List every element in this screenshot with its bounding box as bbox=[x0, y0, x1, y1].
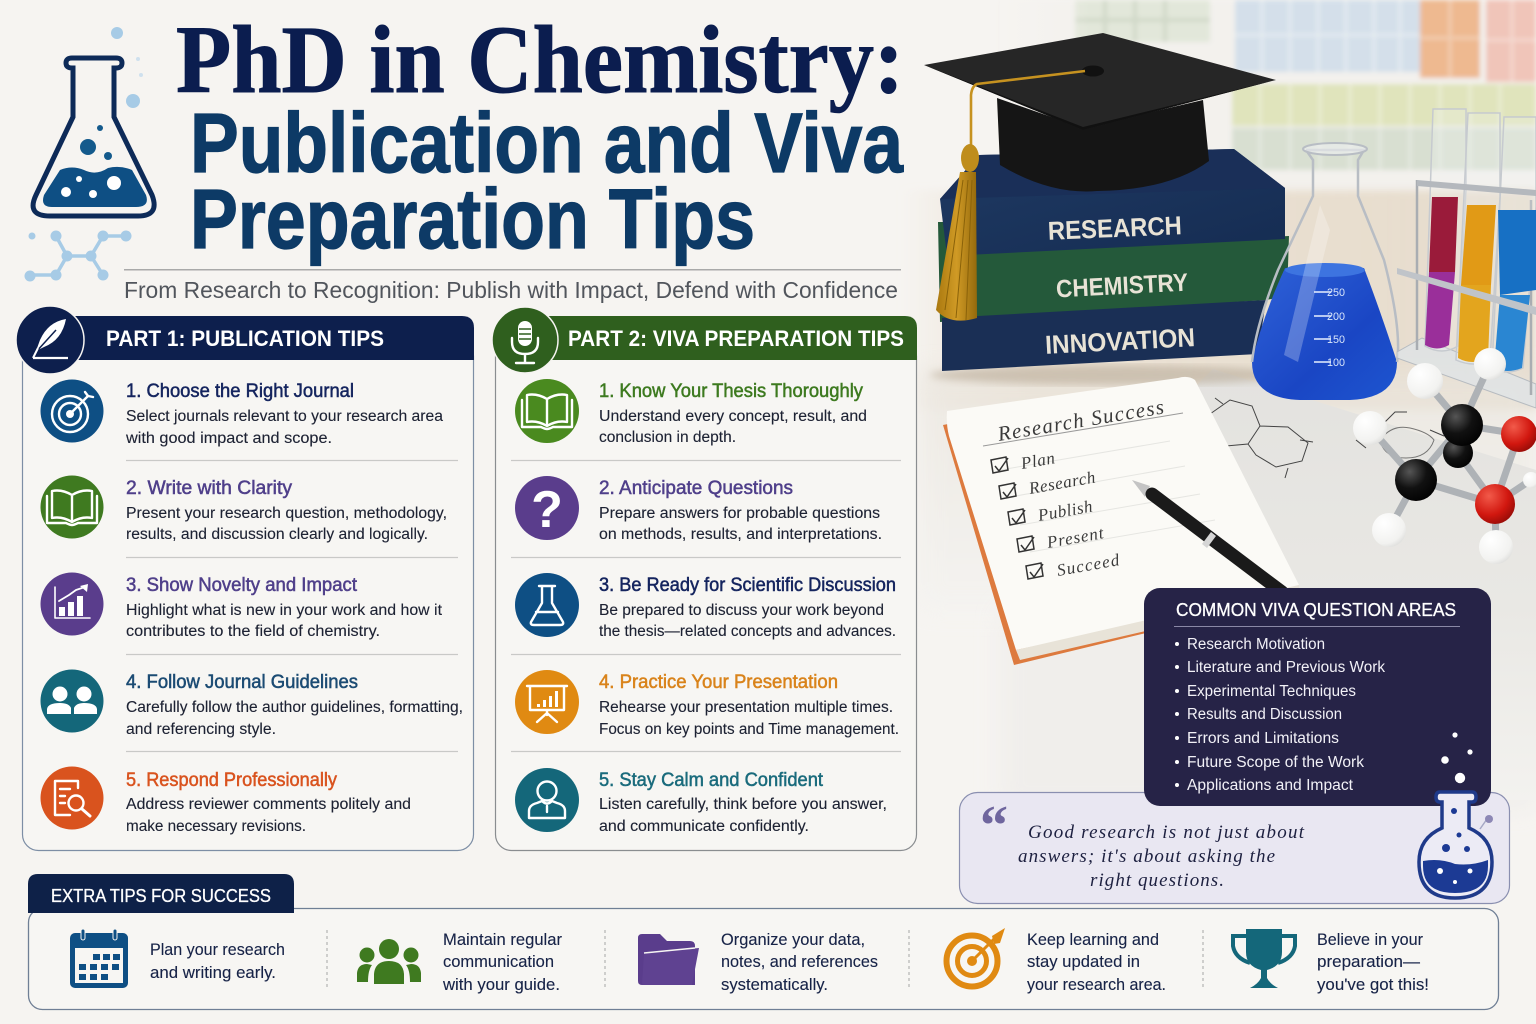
blue tube bbox=[1492, 117, 1536, 372]
icon: document search bbox=[40, 766, 104, 830]
extra tip: keep learning bbox=[946, 928, 1166, 994]
extra tip: plan early bbox=[70, 929, 285, 988]
tip 2: anticipate questions bbox=[515, 476, 882, 543]
tip 1: choose the right journal: Select journals relevant to your research area bbox=[126, 408, 443, 425]
extra tip: keep learning: stay updated in bbox=[1027, 953, 1140, 971]
tip 3: show novelty and impact: contributes to the field of chemistry. bbox=[126, 623, 380, 640]
panel: part 1 publication tips bbox=[16, 306, 474, 850]
icon: group of people bbox=[357, 939, 421, 984]
erlenmeyer flask with blue liquid: 100 bbox=[1327, 357, 1345, 369]
books stack: INNOVATION bbox=[1044, 322, 1196, 360]
extra tip: organize data: systematically. bbox=[721, 976, 828, 994]
tip 5: stay calm and confident: and communicate confidently. bbox=[599, 818, 809, 835]
tip 5: stay calm and confident: 5. Stay Calm and Confident bbox=[599, 770, 824, 791]
chemistry paper bbox=[1194, 369, 1536, 800]
title bbox=[176, 6, 904, 266]
erlenmeyer flask with blue liquid bbox=[1252, 143, 1398, 400]
graduation cap bbox=[924, 33, 1276, 321]
tip 5: respond professionally: Address reviewer comments politely and bbox=[126, 796, 411, 813]
tip 1: know your thesis thoroughly: conclusion in depth. bbox=[599, 429, 736, 446]
tip 3: show novelty and impact: 3. Show Novelty and Impact bbox=[126, 575, 358, 596]
extra tip: believe bbox=[1233, 929, 1429, 994]
panel: common viva question areas: Results and Discussion bbox=[1187, 706, 1342, 723]
extra tip: guide communication: communication bbox=[443, 953, 554, 971]
tip 5: stay calm and confident: Listen carefully, think before you answer, bbox=[599, 796, 887, 813]
tip 1: choose the right journal: 1. Choose the Right Journal bbox=[126, 381, 354, 402]
panel: common viva question areas bbox=[1144, 588, 1491, 806]
extra tip: organize data: Organize your data, bbox=[721, 931, 865, 949]
test tubes in rack bbox=[1397, 109, 1536, 408]
tip 3: be ready for scientific discussion: 3. Be Ready for Scientific Discussion bbox=[599, 575, 896, 596]
panel: common viva question areas: Experimental Techniques bbox=[1187, 683, 1356, 700]
notebook: Research bbox=[1026, 468, 1097, 498]
extra tip: plan early: and writing early. bbox=[150, 964, 276, 982]
icon: book bbox=[40, 476, 104, 538]
extra tip: guide communication bbox=[357, 931, 563, 994]
desk surface bbox=[900, 190, 1536, 410]
extra tip: believe: Believe in your bbox=[1317, 931, 1423, 949]
panel: common viva question areas: COMMON VIVA QUESTION AREAS bbox=[1176, 599, 1456, 620]
panel: extra tips for success bbox=[28, 874, 1498, 1010]
tip 3: be ready for scientific discussion: Be prepared to discuss your work beyond bbox=[599, 602, 884, 619]
books stack bbox=[938, 149, 1289, 371]
panel: common viva question areas: Applications and Impact bbox=[1187, 777, 1354, 794]
tip 5: respond professionally: make necessary revisions. bbox=[126, 818, 306, 835]
extra tip: organize data bbox=[638, 931, 878, 994]
icon: growth chart bbox=[40, 572, 104, 636]
tip 2: write with clarity: results, and discussion clearly and logically. bbox=[126, 526, 428, 543]
tip 4: practice your presentation: 4. Practice Your Presentation bbox=[599, 672, 838, 693]
panel: common viva question areas: Literature and Previous Work bbox=[1187, 659, 1385, 676]
tip 2: anticipate questions: Prepare answers for probable questions bbox=[599, 505, 880, 522]
wall with blurred periodic table bbox=[1000, 0, 1536, 190]
photo: lab desk scene bbox=[900, 0, 1536, 810]
quote box: right questions. bbox=[1090, 870, 1224, 891]
tip 3: be ready for scientific discussion bbox=[515, 573, 896, 640]
molecular model bbox=[1353, 348, 1536, 564]
notebook: Present bbox=[1044, 523, 1106, 552]
icon: open book bbox=[515, 379, 579, 443]
quote box bbox=[960, 792, 1510, 904]
icon: folder bbox=[638, 934, 699, 985]
tip 1: choose the right journal bbox=[40, 380, 443, 447]
icon: trophy bbox=[1233, 929, 1295, 988]
tip 5: respond professionally bbox=[40, 766, 411, 835]
icon: chemistry flask with molecule bbox=[24, 27, 154, 282]
tip 3: show novelty and impact: Highlight what is new in your work and how it bbox=[126, 602, 443, 619]
extra tip: keep learning: your research area. bbox=[1027, 976, 1166, 994]
tip 4: practice your presentation bbox=[515, 670, 899, 738]
tip 5: stay calm and confident bbox=[515, 768, 887, 835]
tip 3: be ready for scientific discussion: the thesis—related concepts and advances. bbox=[599, 623, 896, 640]
tip 1: know your thesis thoroughly bbox=[515, 379, 867, 446]
tip 4: follow journal guidelines: and referencing style. bbox=[126, 721, 276, 738]
tip 1: choose the right journal: with good impact and scope. bbox=[125, 430, 332, 447]
icon: person bbox=[515, 768, 579, 832]
icon: round-bottom flask bbox=[1419, 792, 1493, 898]
extra tip: believe: you've got this! bbox=[1317, 976, 1429, 994]
extra tip: guide communication: with your guide. bbox=[442, 976, 560, 994]
title: PhD in Chemistry: bbox=[176, 6, 904, 113]
notebook: Succeed bbox=[1055, 550, 1121, 580]
tip 4: follow journal guidelines: Carefully follow the author guidelines, formatting, bbox=[126, 699, 463, 716]
tip 2: anticipate questions: on methods, results, and interpretations. bbox=[599, 526, 882, 543]
panel: extra tips for success: EXTRA TIPS FOR SUCCESS bbox=[51, 885, 271, 906]
yellow tube bbox=[1456, 113, 1500, 364]
panel: common viva question areas: Future Scope of the Work bbox=[1187, 754, 1364, 771]
tip 5: respond professionally: 5. Respond Professionally bbox=[126, 770, 337, 791]
extra tip: plan early: Plan your research bbox=[150, 941, 285, 959]
tip 4: practice your presentation: Focus on key points and Time management. bbox=[599, 721, 899, 738]
panel: part 1 publication tips: PART 1: PUBLICATION TIPS bbox=[106, 326, 384, 351]
quote box: Good research is not just about bbox=[1028, 822, 1305, 843]
extra tip: guide communication: Maintain regular bbox=[443, 931, 563, 949]
notebook bbox=[943, 377, 1299, 665]
tip 2: write with clarity bbox=[40, 476, 447, 543]
shadow under books bbox=[930, 365, 1290, 385]
pen bbox=[1132, 480, 1282, 592]
icon: calendar bbox=[70, 929, 128, 988]
erlenmeyer flask with blue liquid: 250 bbox=[1327, 287, 1345, 299]
icon: question mark bbox=[515, 476, 579, 540]
subtitle: From Research to Recognition: Publish with Impact, Defend with Confidence bbox=[124, 277, 898, 303]
tip 2: anticipate questions: 2. Anticipate Questions bbox=[599, 478, 793, 499]
notebook: Plan bbox=[1018, 448, 1056, 473]
red and purple tube bbox=[1425, 109, 1466, 351]
extra tip: organize data: notes, and references bbox=[721, 953, 878, 971]
tip 4: follow journal guidelines bbox=[40, 670, 463, 738]
erlenmeyer flask with blue liquid: 150 bbox=[1327, 334, 1345, 346]
icon: quill bbox=[16, 306, 84, 374]
tip 4: practice your presentation: Rehearse your presentation multiple times. bbox=[599, 699, 893, 716]
quote box: answers; it's about asking the bbox=[1018, 846, 1275, 867]
quote box: “ bbox=[980, 795, 1008, 857]
icon: target with arrow bbox=[946, 928, 1005, 986]
icon: presentation board bbox=[515, 670, 579, 734]
panel: part 2 viva preparation tips bbox=[492, 307, 917, 850]
tip 2: write with clarity: 2. Write with Clarity bbox=[126, 478, 293, 499]
title: Preparation Tips bbox=[190, 172, 755, 266]
icon: people bbox=[40, 670, 104, 732]
books stack: CHEMISTRY bbox=[1055, 269, 1189, 303]
tip 4: follow journal guidelines: 4. Follow Journal Guidelines bbox=[126, 672, 358, 693]
icon: flask bbox=[515, 573, 579, 637]
icon: microphone bbox=[492, 307, 558, 373]
tip 2: write with clarity: Present your research question, methodology, bbox=[126, 505, 447, 522]
panel: common viva question areas: Research Motivation bbox=[1187, 636, 1325, 653]
tip 1: know your thesis thoroughly: 1. Know Your Thesis Thoroughly bbox=[599, 381, 863, 402]
notebook: Publish bbox=[1035, 497, 1094, 525]
tip 3: show novelty and impact bbox=[40, 572, 443, 640]
title: Publication and Viva bbox=[190, 96, 904, 190]
extra tip: keep learning: Keep learning and bbox=[1027, 931, 1159, 949]
icon: question mark: ? bbox=[531, 481, 563, 539]
panel: common viva question areas: Errors and Limitations bbox=[1187, 730, 1339, 747]
notebook: Research Success bbox=[995, 395, 1166, 446]
icon: target bbox=[40, 380, 104, 442]
extra tip: believe: preparation— bbox=[1317, 953, 1421, 971]
erlenmeyer flask with blue liquid: 200 bbox=[1327, 311, 1345, 323]
tip 1: know your thesis thoroughly: Understand every concept, result, and bbox=[599, 408, 867, 425]
panel: part 2 viva preparation tips: PART 2: VIVA PREPARATION TIPS bbox=[568, 326, 904, 351]
books stack: RESEARCH bbox=[1047, 210, 1182, 246]
